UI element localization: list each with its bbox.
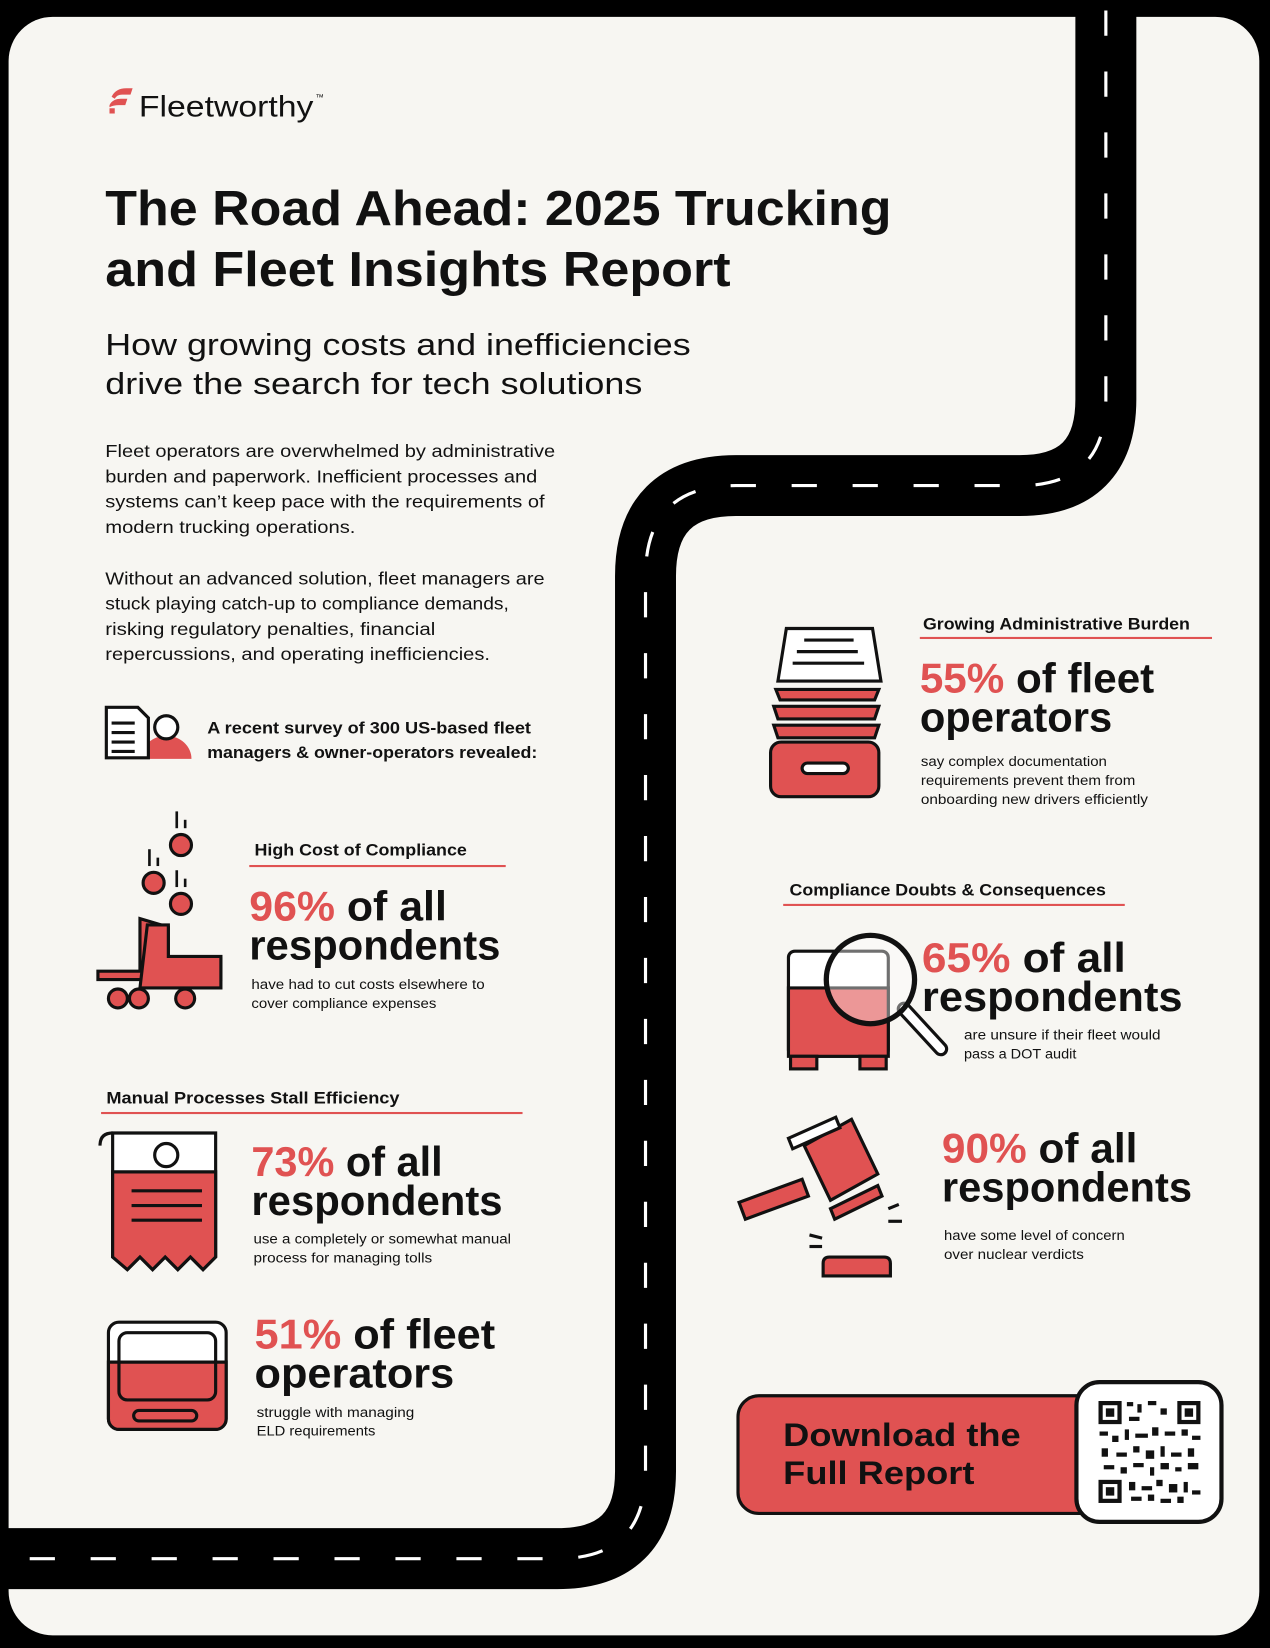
- icon: truck with coins: [98, 811, 221, 1008]
- survey text: [207, 719, 537, 762]
- intro text: stuck playing catch-up to compliance demands,: [105, 594, 509, 614]
- panel: growing administrative burden: operators: [920, 694, 1112, 741]
- logo: Fleetworthy: [139, 91, 314, 124]
- panel: growing administrative burden: 55% of fleet: [920, 655, 1154, 702]
- intro text: modern trucking operations.: [105, 517, 355, 537]
- panel: high cost of compliance: cover compliance expenses: [251, 996, 437, 1011]
- panel: high cost of compliance: 96% of all: [249, 883, 447, 930]
- panel: high cost of compliance: have had to cut costs elsewhere to: [251, 977, 485, 992]
- panel: growing administrative burden: onboarding new drivers efficiently: [921, 792, 1148, 807]
- stat: 90%: respondents: [942, 1163, 1192, 1210]
- stat: 73%: 73% of all: [251, 1138, 443, 1185]
- panel: high cost of compliance: High Cost of Compliance: [255, 841, 467, 860]
- title: [105, 181, 891, 297]
- icon: receipt: [100, 1133, 216, 1270]
- intro text: burden and paperwork. Inefficient processes and: [105, 466, 537, 486]
- icon: survey: [106, 707, 191, 759]
- stat: 73%: use a completely or somewhat manual: [253, 1231, 511, 1246]
- stat: 65%: are unsure if their fleet would: [964, 1027, 1161, 1042]
- panel: growing administrative burden: say complex documentation: [921, 754, 1107, 769]
- icon: truck with magnifier: [788, 935, 941, 1069]
- stat: 65%: 65% of all: [922, 934, 1126, 981]
- title: and Fleet Insights Report: [105, 242, 731, 297]
- intro text: Without an advanced solution, fleet managers are: [105, 568, 545, 588]
- icon: file drawer: [771, 629, 881, 797]
- download button: Download the: [783, 1417, 1021, 1453]
- download button: [738, 1396, 1116, 1513]
- title: The Road Ahead: 2025 Trucking: [105, 181, 891, 236]
- download button: Full Report: [783, 1455, 975, 1491]
- stat: 65%: pass a DOT audit: [964, 1046, 1077, 1061]
- intro text: [105, 441, 555, 664]
- stat: 90%: [942, 1124, 1192, 1262]
- survey text: A recent survey of 300 US-based fleet: [207, 719, 531, 738]
- panel: high cost of compliance: [249, 841, 506, 1011]
- logo: ™: [315, 92, 324, 102]
- stat: 51%: ELD requirements: [257, 1424, 376, 1439]
- heading: compliance doubts: Compliance Doubts & Consequences: [789, 880, 1106, 899]
- icon: gavel: [739, 1117, 902, 1276]
- stat: 90%: 90% of all: [942, 1124, 1137, 1171]
- stat: 65%: [922, 934, 1183, 1061]
- icon: ELD device: [108, 1322, 226, 1429]
- stat: 73%: respondents: [251, 1177, 503, 1224]
- intro text: systems can’t keep pace with the requirements of: [105, 492, 545, 512]
- heading: manual processes: Manual Processes Stall Efficiency: [106, 1089, 400, 1108]
- logo: [109, 88, 324, 124]
- stat: 51%: 51% of fleet: [255, 1310, 495, 1357]
- QR code: [1076, 1382, 1221, 1522]
- survey text: managers & owner-operators revealed:: [207, 743, 537, 762]
- panel: growing administrative burden: Growing Administrative Burden: [923, 615, 1190, 634]
- subtitle: [105, 328, 691, 401]
- stat: 90%: over nuclear verdicts: [944, 1247, 1084, 1262]
- stat: 90%: have some level of concern: [944, 1228, 1125, 1243]
- intro text: risking regulatory penalties, financial: [105, 619, 435, 639]
- stat: 65%: respondents: [922, 973, 1183, 1020]
- subtitle: How growing costs and inefficiencies: [105, 328, 691, 362]
- stat: 51%: operators: [255, 1349, 454, 1396]
- intro text: Fleet operators are overwhelmed by administrative: [105, 441, 555, 461]
- stat: 73%: process for managing tolls: [253, 1250, 432, 1265]
- stat: 73%: [251, 1138, 511, 1265]
- subtitle: drive the search for tech solutions: [105, 367, 642, 401]
- stat: 51%: struggle with managing: [257, 1405, 414, 1420]
- panel: growing administrative burden: [920, 615, 1212, 807]
- intro text: repercussions, and operating inefficiencies.: [105, 644, 490, 664]
- panel: high cost of compliance: respondents: [249, 922, 500, 969]
- panel: growing administrative burden: requirements prevent them from: [921, 773, 1135, 788]
- stat: 51%: [255, 1310, 495, 1439]
